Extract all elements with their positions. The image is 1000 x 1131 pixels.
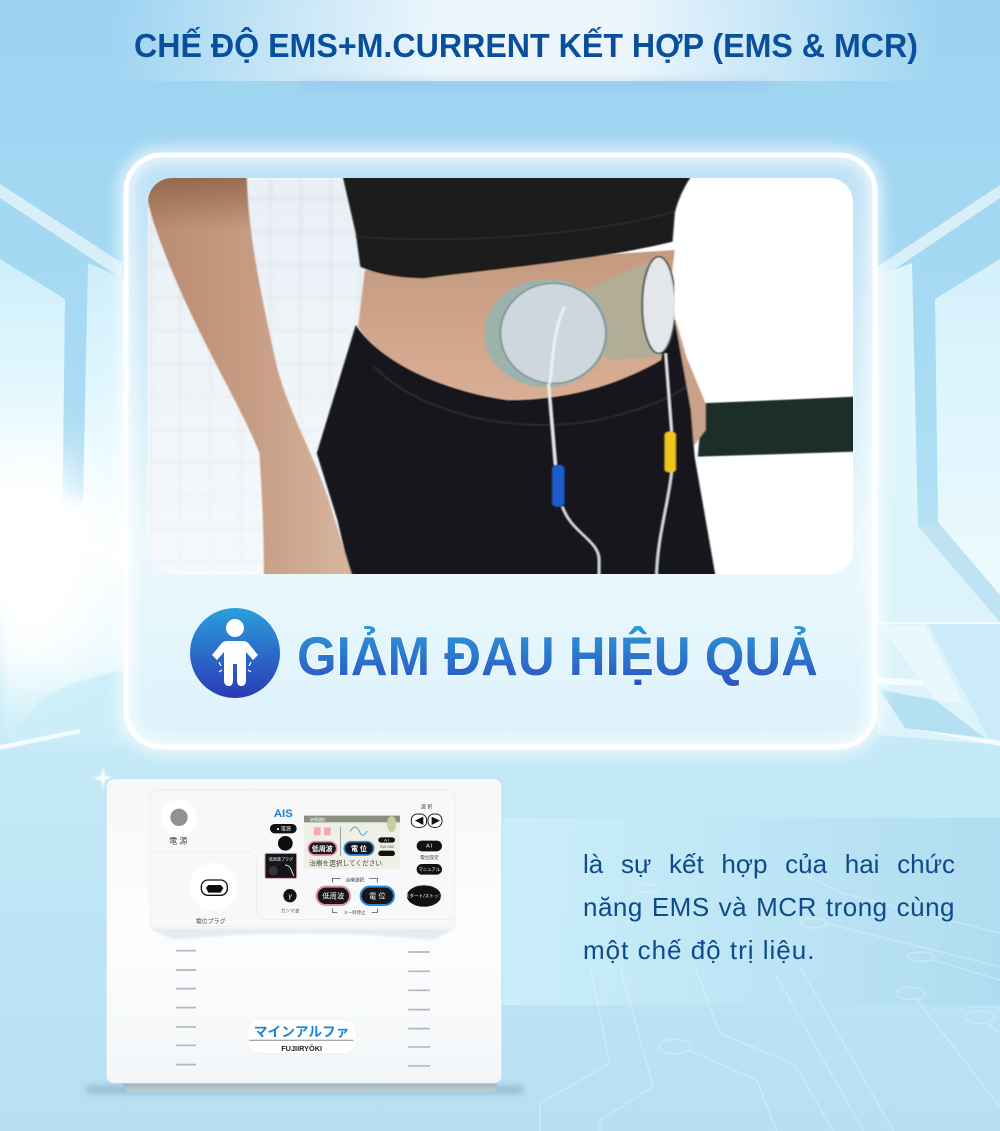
power button: 電 源 (169, 837, 187, 846)
LCD screen: A I (384, 838, 389, 843)
treatment buttons: 治療選択 (346, 876, 365, 883)
treatment buttons: 電 位 (369, 892, 386, 901)
text block: description: một chế độ trị liệu. (583, 935, 815, 965)
LCD screen: 治療を選択してください (309, 858, 382, 867)
brand label: FUJIIRYŌKI (281, 1044, 322, 1053)
start stop button (405, 885, 444, 907)
LCD screen: 治療選択 (310, 816, 326, 822)
title: CHẾ ĐỘ EMS+M.CURRENT KẾT HỢP (EMS & MCR) (134, 26, 918, 64)
panel: main glowing card (126, 155, 875, 747)
LCD screen: 70/0 2/50 (380, 845, 394, 849)
power button (161, 799, 197, 846)
treatment buttons: 低周波 (322, 892, 345, 901)
panel: lower circuit backdrop (500, 818, 1000, 1131)
control panel (265, 804, 444, 915)
text block: description: năng EMS và MCR trong cùng (583, 892, 955, 922)
brand label (247, 1019, 357, 1053)
brand label: マインアルファ (254, 1025, 349, 1040)
plug socket (189, 863, 237, 925)
vents (176, 951, 430, 1066)
mode buttons: 電位設定 (420, 854, 439, 861)
LCD screen: 低周波 (312, 844, 333, 853)
device: Mine Alpha therapy unit (87, 778, 523, 1093)
mode buttons: A I (426, 844, 432, 850)
icon: person with pain marks (190, 608, 280, 698)
control panel: γ (288, 893, 292, 900)
control panel: ● 電源 (276, 825, 291, 832)
title bar (110, 0, 940, 88)
selector arrows (411, 804, 442, 827)
text block: description (583, 849, 955, 965)
start stop button: スタート/ストップ (405, 893, 444, 900)
mode buttons (417, 841, 442, 875)
control panel: 低周波プラグ (269, 855, 293, 861)
plug socket: 電位プラグ (196, 917, 226, 925)
heading: GIẢM ĐAU HIỆU QUẢ: GIẢM ĐAU HIỆU QUẢ (297, 625, 818, 687)
treatment buttons: II 一時停止 (345, 909, 366, 915)
control panel: AIS (274, 808, 293, 820)
text block: description: là sự kết hợp của hai chức (583, 849, 955, 879)
selector arrows: 選 択 (421, 804, 432, 811)
treatment buttons (317, 876, 394, 915)
LCD screen (304, 816, 400, 869)
LCD screen: 電 位 (351, 844, 367, 853)
mode buttons: マニュアル (419, 867, 441, 873)
control panel: ガンマ波 (281, 908, 300, 915)
photo: electrodes on waist (145, 173, 856, 580)
sparkle (91, 766, 115, 790)
